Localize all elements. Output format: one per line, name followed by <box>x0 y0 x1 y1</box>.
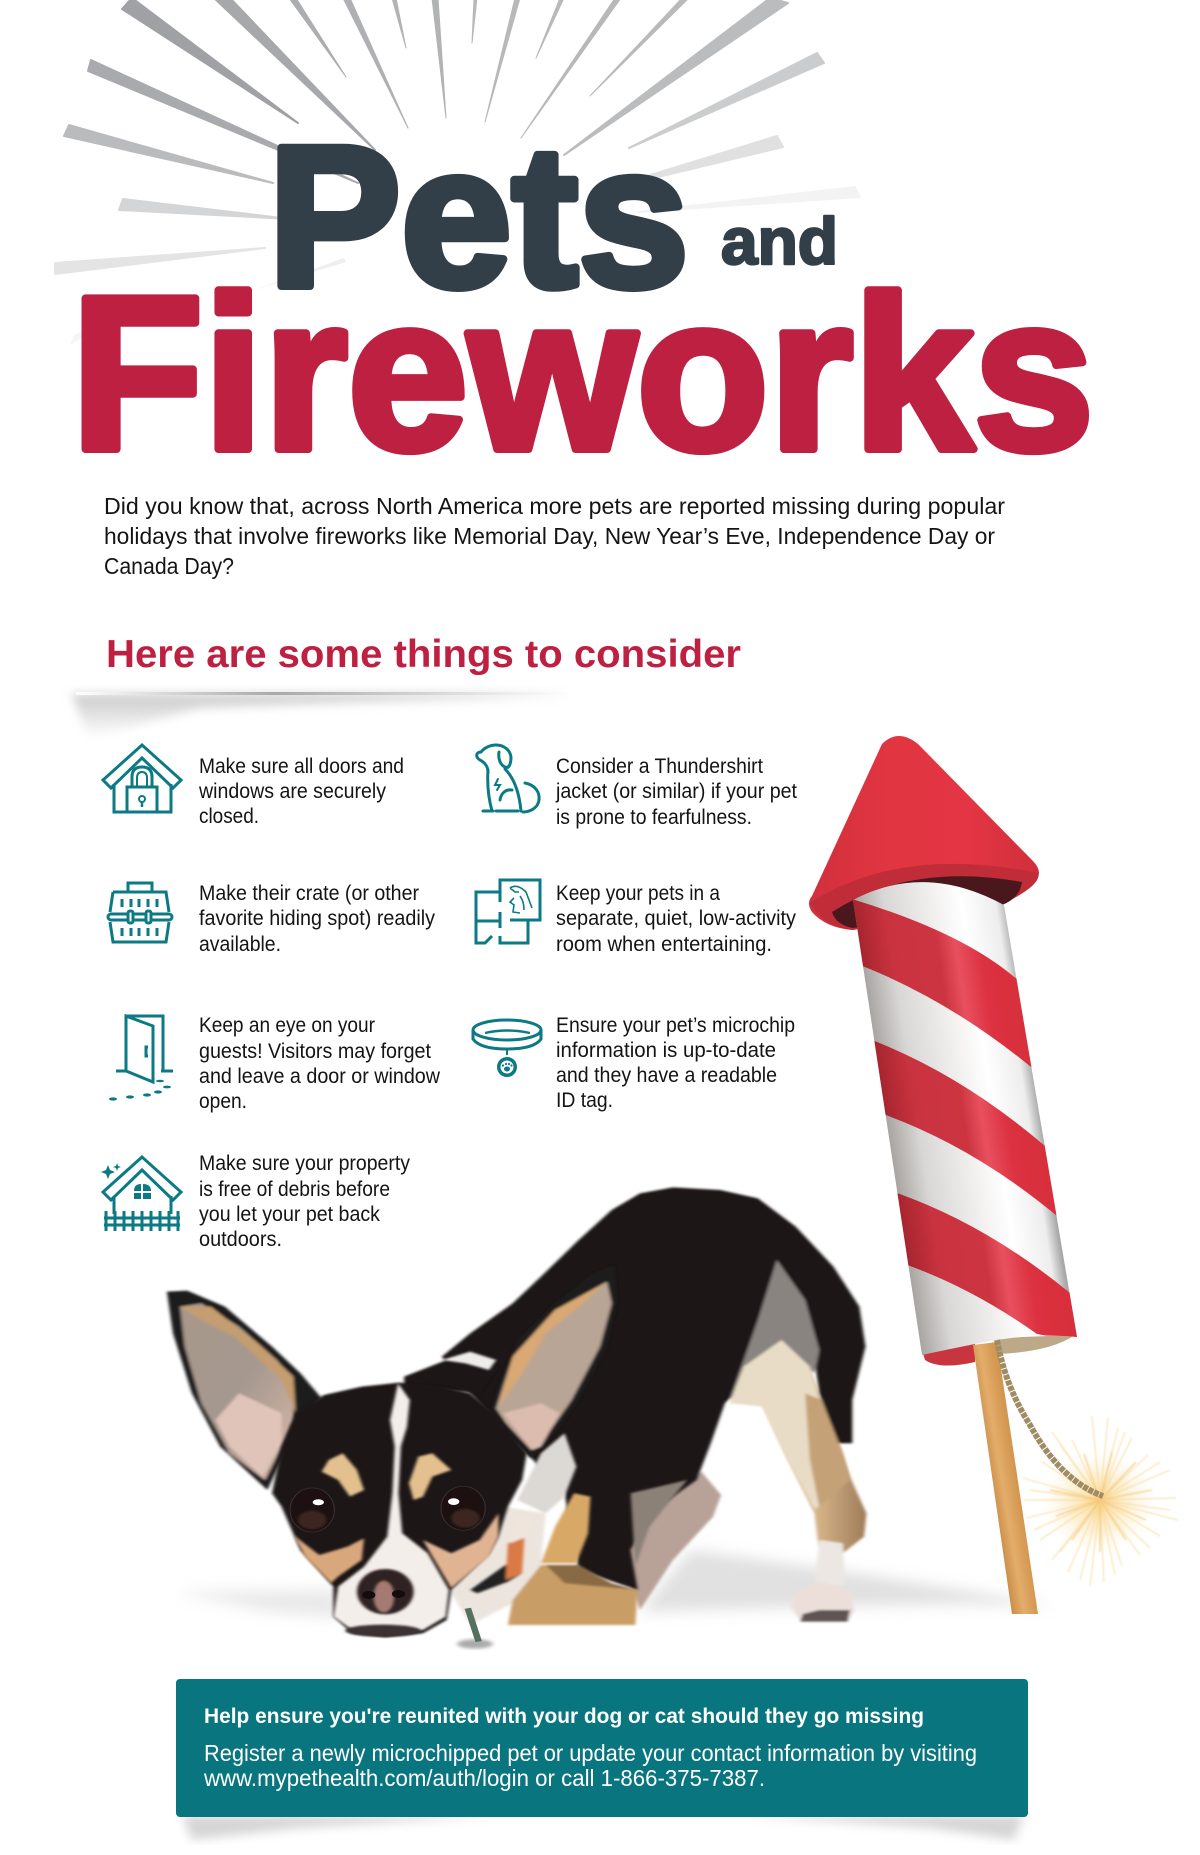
rocket inner base <box>922 1335 1075 1366</box>
dog body <box>442 1187 865 1590</box>
ground shadow <box>175 1550 1055 1618</box>
intro paragraph: holidays that involve fireworks like Memorial Day, New Year’s Eve, Independence Day or <box>104 523 995 549</box>
dog neck stripe <box>404 1360 498 1393</box>
tip text <box>199 1151 410 1251</box>
rocket stick <box>973 1342 1038 1614</box>
tip text: windows are securely <box>198 779 386 803</box>
tip text: Make sure all doors and <box>199 754 404 778</box>
rocket fuse <box>997 1340 1103 1496</box>
tip text: Keep an eye on your <box>199 1013 375 1037</box>
icon: open door with paw prints <box>109 1016 173 1101</box>
banner body text <box>203 1740 977 1791</box>
tip text: guests! Visitors may forget <box>199 1039 431 1063</box>
title word: and: and <box>721 204 838 278</box>
intro paragraph: Canada Day? <box>104 553 234 579</box>
tip text: favorite hiding spot) readily <box>199 906 435 930</box>
tip: thundershirt <box>477 745 797 829</box>
tip text: and they have a readable <box>556 1063 777 1087</box>
banner body text: Register a newly microchipped pet or update your contact information by visiting <box>204 1740 977 1766</box>
tip: microchip and tag <box>473 1013 795 1112</box>
tip text: Ensure your pet’s microchip <box>556 1013 795 1037</box>
dog far foreleg <box>621 1472 721 1610</box>
tip text: you let your pet back <box>199 1202 380 1226</box>
tip text <box>199 881 435 956</box>
tip text: available. <box>199 932 281 956</box>
dog collar tag <box>457 1608 493 1649</box>
title word: Pets: Pets <box>268 104 689 329</box>
dog cheeks <box>293 1513 498 1588</box>
dog chest and foreleg <box>451 1433 687 1625</box>
tip text: open. <box>199 1089 247 1113</box>
banner heading: Help ensure you're reunited with your dog or cat should they go missing <box>204 1704 924 1728</box>
call-to-action banner <box>176 1679 1028 1817</box>
dog brows <box>322 1453 451 1500</box>
icon: sitting dog <box>477 745 539 812</box>
icon: house with fence <box>101 1157 181 1231</box>
intro paragraph <box>104 493 1005 579</box>
fuse sparkler <box>1023 1416 1178 1586</box>
icon: collar with tag <box>473 1020 541 1077</box>
icon: house with padlock <box>103 745 181 812</box>
tip text: closed. <box>199 804 259 828</box>
title <box>71 104 1094 496</box>
chihuahua dog <box>167 1187 866 1649</box>
tip text: separate, quiet, low-activity <box>556 906 796 930</box>
subheading: Here are some things to consider <box>106 633 741 676</box>
dog rear leg <box>758 1347 866 1622</box>
tip text: room when entertaining. <box>556 932 772 956</box>
tip text: information is up-to-date <box>556 1038 776 1062</box>
burst rays behind title <box>55 0 860 345</box>
title word: Fireworks: Fireworks <box>71 252 1094 496</box>
tip: clear debris <box>101 1151 410 1251</box>
tip text: jacket (or similar) if your pet <box>555 779 797 803</box>
firework rocket <box>809 736 1178 1614</box>
tip text: and leave a door or window <box>199 1064 440 1088</box>
dog right ear <box>491 1265 617 1458</box>
tip text: Keep your pets in a <box>556 881 720 905</box>
tip text: Make sure your property <box>199 1151 410 1175</box>
tip text: Consider a Thundershirt <box>556 754 763 778</box>
tip: quiet room <box>476 880 796 956</box>
tip text <box>199 1013 440 1113</box>
tip text: outdoors. <box>199 1227 282 1251</box>
tip text: is free of debris before <box>199 1177 390 1201</box>
tip text <box>198 754 404 828</box>
tip text: is prone to fearfulness. <box>556 805 752 829</box>
dog chin <box>345 1625 421 1637</box>
icon: pet crate <box>108 883 172 942</box>
banner shadow <box>182 1815 1024 1840</box>
banner body text: www.mypethealth.com/auth/login or call 1-866-375-7387. <box>203 1765 765 1791</box>
tip: pet crate <box>108 881 435 956</box>
tip text: ID tag. <box>556 1088 613 1112</box>
dog white blaze and muzzle <box>333 1383 449 1633</box>
dog head <box>272 1383 527 1637</box>
tip: watch guests <box>109 1013 440 1113</box>
dog nose <box>357 1569 414 1614</box>
tip text <box>556 1013 795 1112</box>
dog right eye <box>441 1486 485 1530</box>
dog left ear <box>167 1291 322 1490</box>
icon: floor plan with pets <box>476 880 540 943</box>
intro paragraph: Did you know that, across North America more pets are reported missing during popular <box>104 493 1005 519</box>
rocket cone <box>809 736 1039 930</box>
tip: secure doors and windows <box>103 745 404 828</box>
dog left eye <box>290 1488 334 1532</box>
rocket tube with stripes <box>853 882 1077 1355</box>
dog collar <box>470 1517 532 1593</box>
banner panel <box>176 1679 1028 1817</box>
tip text <box>556 881 796 956</box>
tip text: Make their crate (or other <box>199 881 419 905</box>
tip text <box>555 754 797 829</box>
